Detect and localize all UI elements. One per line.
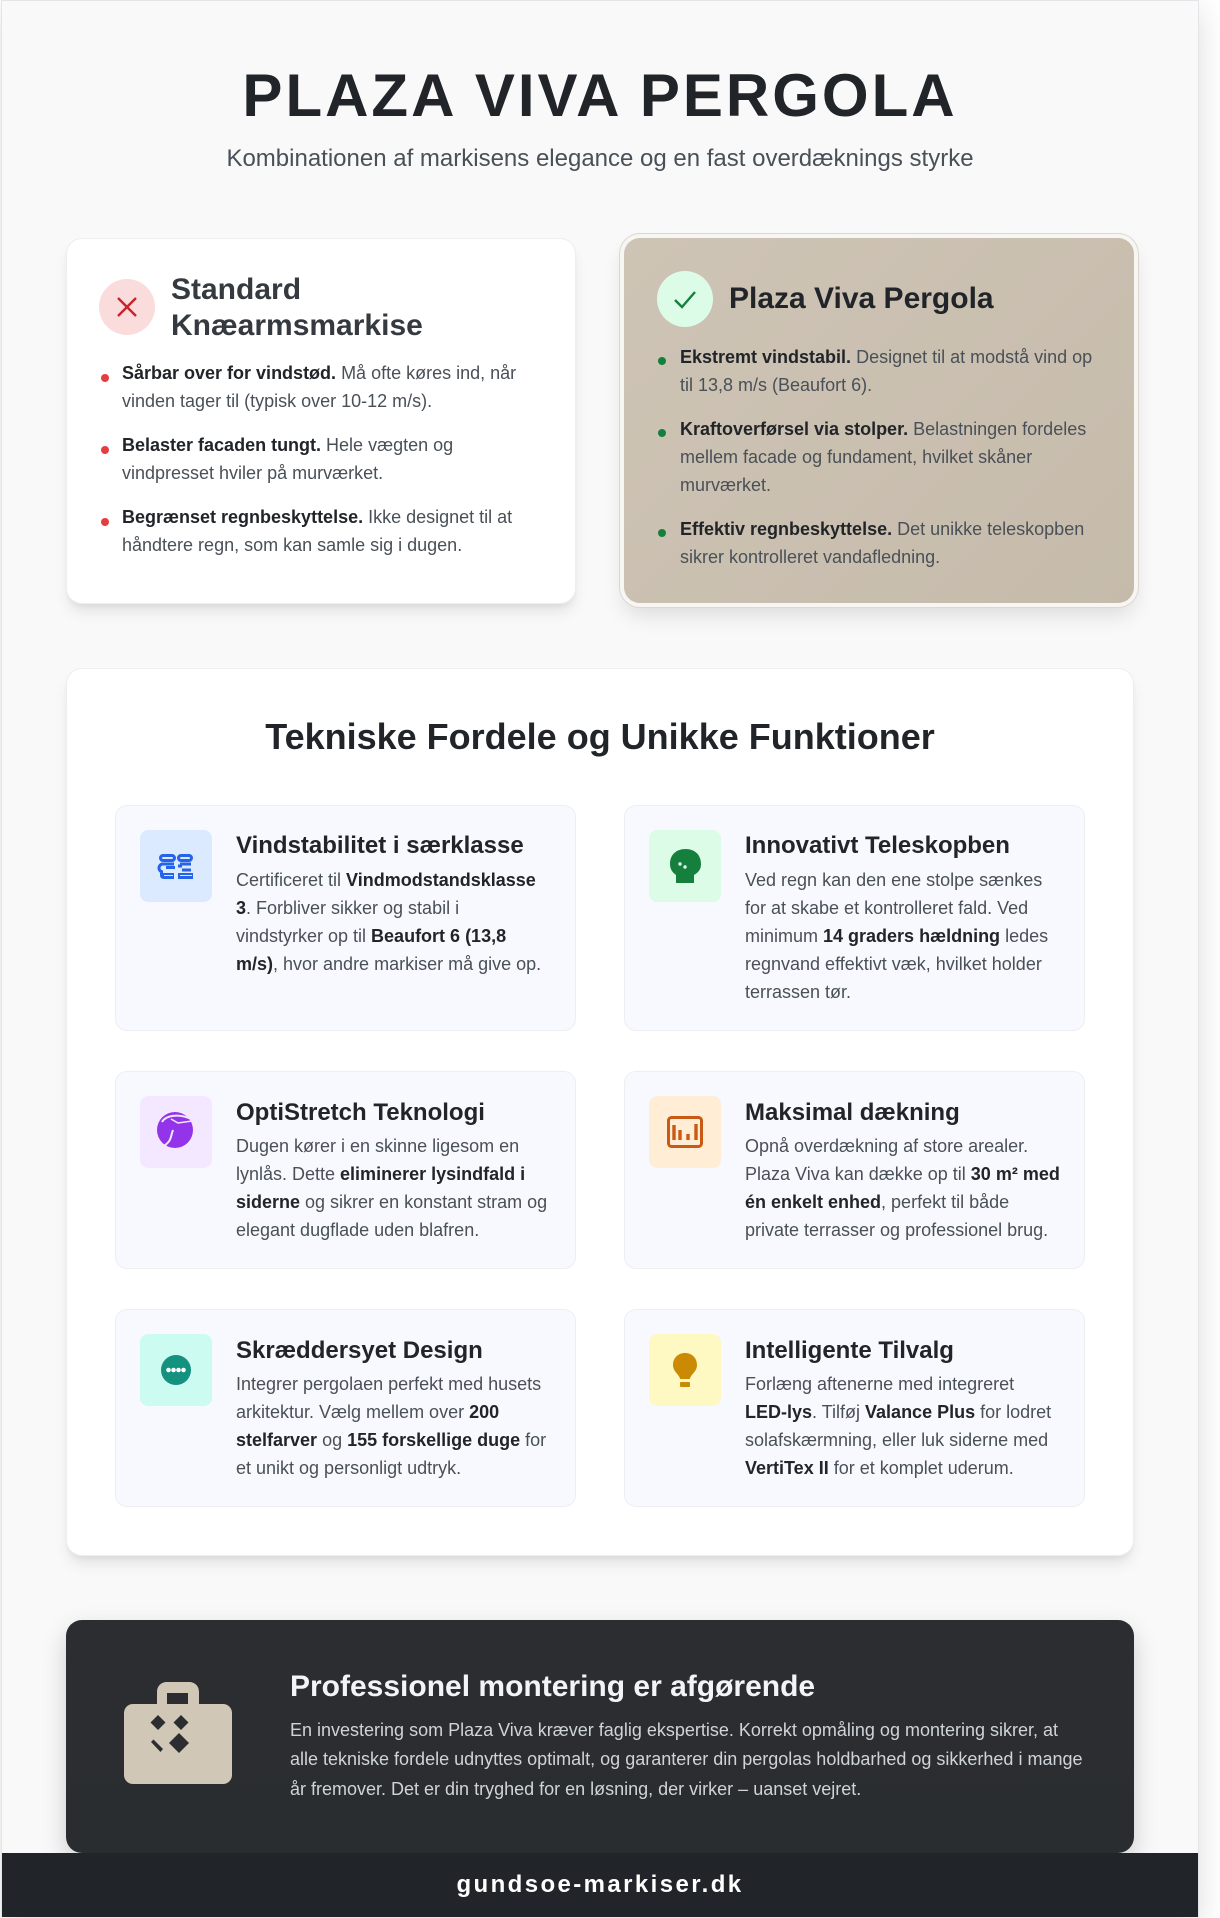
list: standard awning drawbacks: Sårbar over for vindstød. Må ofte køres ind, når [122, 363, 516, 383]
heading: Maksimal dækning [745, 1099, 960, 1126]
heading: Intelligente Tilvalg [745, 1337, 954, 1364]
heading: Plaza Viva Pergola: Plaza Viva Pergola [729, 282, 994, 315]
text: m/s), hvor andre markiser må give op. [236, 954, 541, 974]
heading: Skræddersyet Design [236, 1337, 483, 1364]
text: installation: alle tekniske fordele udnyttes optimalt, og garanterer din pergolas holdbarhed og sikkerhed i mange [290, 1749, 1082, 1769]
text: Dugen kører i en skinne ligesom en [236, 1136, 519, 1156]
text: arkitektur. Vælg mellem over 200 [236, 1402, 499, 1422]
text: stelfarver og 155 forskellige duge for [236, 1430, 546, 1450]
text: et unikt og personligt udtryk. [236, 1458, 461, 1478]
feature card: options [624, 1309, 1085, 1507]
list: standard awning drawbacks: håndtere regn, som kan samle sig i dugen. [122, 535, 462, 555]
text: Ved regn kan den ene stolpe sænkes [745, 870, 1042, 890]
text: 3. Forbliver sikker og stabil i [236, 898, 459, 918]
heading: standard awning [171, 273, 423, 342]
list: standard awning drawbacks: vinden tager til (typisk over 10-12 m/s). [122, 391, 432, 411]
panel: Plaza Viva Pergola [624, 238, 1134, 603]
list: Plaza Viva advantages: til 13,8 m/s (Beaufort 6). [680, 375, 872, 395]
icon: wind [140, 830, 212, 902]
heading: installation: Professionel montering er afgørende [290, 1670, 815, 1703]
feature card: coverage [624, 1071, 1085, 1269]
text: Integrer pergolaen perfekt med husets [236, 1374, 541, 1394]
icon: telescope post [649, 830, 721, 902]
heading: standard awning: Knæarmsmarkise [171, 309, 423, 342]
list: Plaza Viva advantages: sikrer kontrolleret vandafledning. [680, 547, 940, 567]
icon: red cross [99, 279, 155, 335]
text: vindstyrker op til Beaufort 6 (13,8 [236, 926, 506, 946]
text [236, 870, 541, 974]
footer: gundsoe-markiser.dk [456, 1871, 744, 1898]
footer [2, 1853, 1198, 1917]
text: terrassen tør. [745, 982, 851, 1002]
list: Plaza Viva advantages: Ekstremt vindstabil. Designet til at modstå vind op [680, 347, 1092, 367]
feature card: OptiStretch [115, 1071, 576, 1269]
heading: Innovativt Teleskopben [745, 832, 1010, 859]
text: siderne og sikrer en konstant stram og [236, 1192, 547, 1212]
text: VertiTex II for et komplet uderum. [745, 1458, 1014, 1478]
text: solafskærmning, eller luk siderne med [745, 1430, 1048, 1450]
icon: OptiStretch [140, 1096, 212, 1168]
text: private terrasser og professionel brug. [745, 1220, 1048, 1240]
text [236, 1136, 547, 1240]
text: elegant dugflade uden blafren. [236, 1220, 479, 1240]
text: Plaza Viva kan dække op til 30 m² med [745, 1164, 1060, 1184]
text [745, 1136, 1060, 1240]
heading: Vindstabilitet i særklasse [236, 832, 524, 859]
feature card: custom design [115, 1309, 576, 1507]
text: lynlås. Dette eliminerer lysindfald i [236, 1164, 525, 1184]
icon: light bulb [649, 1334, 721, 1406]
panel: technical advantages [66, 668, 1134, 1556]
subtitle: Kombinationen af markisens elegance og en fast overdæknings styrke [226, 145, 974, 172]
list: Plaza Viva advantages: Effektiv regnbeskyttelse. Det unikke teleskopben [680, 519, 1084, 539]
list: Plaza Viva advantages: Kraftoverførsel via stolper. Belastningen fordeles [680, 419, 1086, 439]
feature card: wind stability [115, 805, 576, 1031]
icon: toolbox [124, 1682, 232, 1784]
text: Opnå overdækning af store arealer. [745, 1136, 1028, 1156]
text: for at skabe et kontrolleret fald. Ved [745, 898, 1028, 918]
text: Certificeret til Vindmodstandsklasse [236, 870, 536, 890]
panel: professional installation [66, 1620, 1134, 1853]
icon: coverage [649, 1096, 721, 1168]
text: LED-lys. Tilføj Valance Plus for lodret [745, 1402, 1051, 1422]
text: minimum 14 graders hældning ledes [745, 926, 1048, 946]
text [745, 870, 1048, 1002]
heading: standard awning: Standard [171, 273, 301, 306]
text: installation: år fremover. Det er din tryghed for en løsning, der virker – uanset vejret. [290, 1779, 861, 1799]
list: Plaza Viva advantages: murværket. [680, 475, 771, 495]
section heading: Tekniske Fordele og Unikke Funktioner [265, 716, 935, 757]
panel: standard awning [66, 238, 576, 604]
list: Plaza Viva advantages [658, 347, 1092, 567]
list: Plaza Viva advantages: mellem facade og fundament, hvilket skåner [680, 447, 1032, 467]
list: standard awning drawbacks: Belaster facaden tungt. Hele vægten og [122, 435, 453, 455]
text: installation: En investering som Plaza Viva kræver faglig ekspertise. Korrekt opmåling og montering sikrer, at [290, 1720, 1058, 1740]
text: én enkelt enhed, perfekt til både [745, 1192, 1009, 1212]
text [745, 1374, 1051, 1478]
icon: colours [140, 1334, 212, 1406]
title: PLAZA VIVA PERGOLA [242, 62, 958, 129]
heading: OptiStretch Teknologi [236, 1099, 485, 1126]
list: standard awning drawbacks: vindpresset hviler på murværket. [122, 463, 383, 483]
text: Forlæng aftenerne med integreret [745, 1374, 1014, 1394]
text: regnvand effektivt væk, hvilket holder [745, 954, 1042, 974]
text [236, 1374, 546, 1478]
feature card: telescope post [624, 805, 1085, 1031]
icon: green check [657, 271, 713, 327]
text: installation [290, 1720, 1082, 1799]
list: standard awning drawbacks [101, 363, 516, 555]
list: standard awning drawbacks: Begrænset regnbeskyttelse. Ikke designet til at [122, 507, 512, 527]
